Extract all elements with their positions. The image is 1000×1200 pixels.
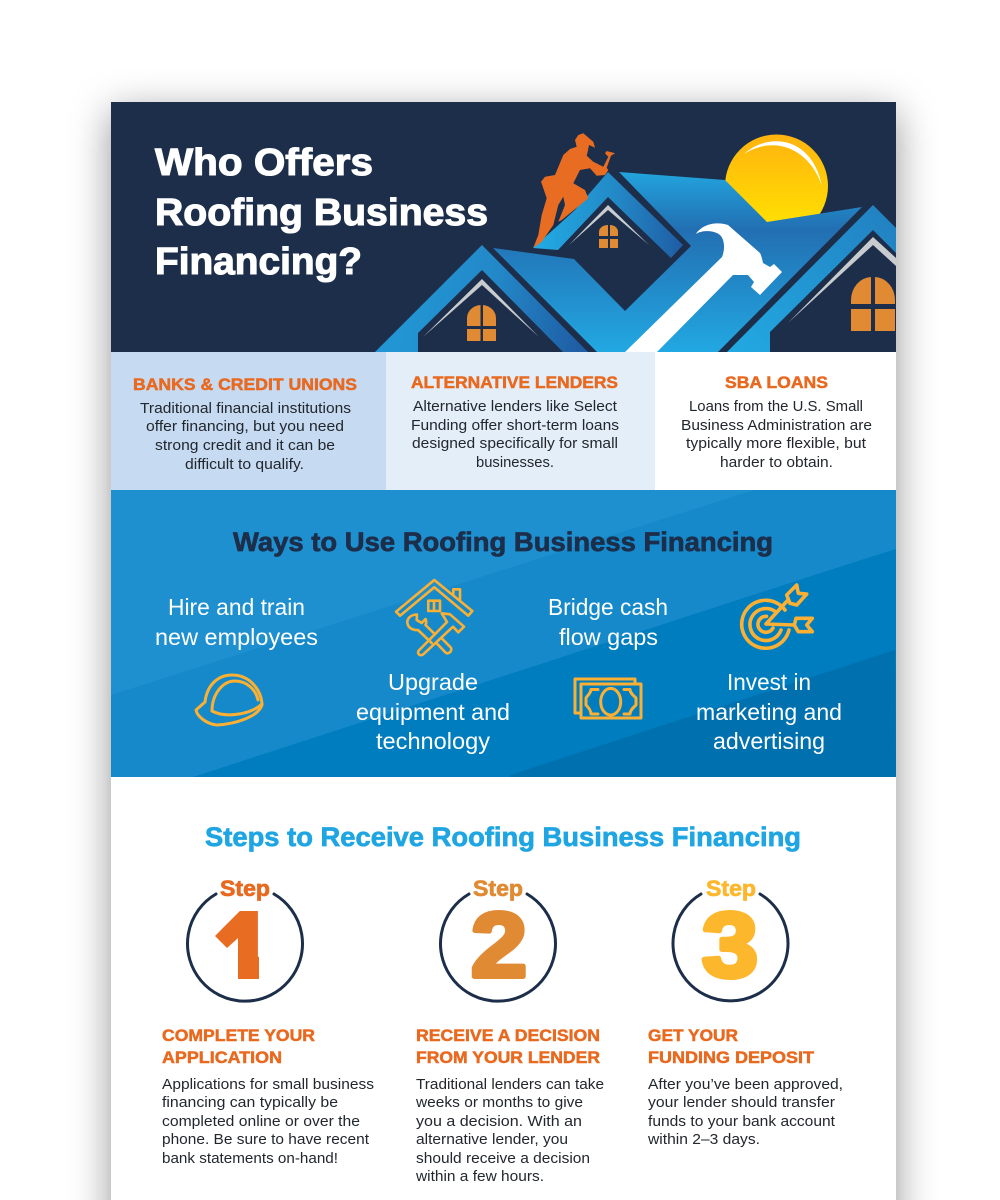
item: invest in marketing	[696, 585, 842, 754]
step 2 text: Traditional lenders can take	[416, 1076, 604, 1093]
step 2	[415, 876, 604, 1185]
step 2 text: alternative lender, you	[416, 1131, 568, 1148]
icon: sun	[725, 134, 828, 222]
panel: lender types	[111, 352, 896, 490]
icon: target with arrows	[742, 585, 812, 648]
step 3 badge	[673, 876, 788, 1001]
step 2 text: FROM YOUR LENDER	[416, 1048, 600, 1067]
panel: banks and credit unions: difficult to qualify.	[185, 456, 304, 473]
icon: hammer	[624, 223, 782, 353]
panel: infographic page	[111, 102, 896, 1200]
item: hire and train	[155, 594, 318, 725]
panel: header	[111, 102, 896, 353]
icon: window	[851, 277, 895, 331]
panel: alternative lenders: businesses.	[476, 454, 554, 471]
item: invest in marketing: marketing and	[696, 699, 842, 725]
heading: Ways to Use Roofing Business Financing	[233, 527, 773, 557]
step 3 text	[647, 1026, 843, 1148]
step 3 badge: Step	[706, 876, 756, 901]
step 2 text: should receive a decision	[416, 1150, 590, 1167]
step 3 text: funds to your bank account	[648, 1113, 836, 1130]
item: upgrade equipment	[356, 580, 510, 754]
page shadow	[111, 112, 896, 1200]
step 1 badge	[187, 876, 302, 1001]
step 2 text	[415, 1026, 604, 1185]
item: invest in marketing: Invest in	[727, 669, 811, 695]
icon: window	[467, 305, 496, 341]
step 2 text: you a decision. With an	[416, 1113, 582, 1130]
panel: alternative lenders: ALTERNATIVE LENDERS	[411, 373, 618, 392]
step 2 text: within a few hours.	[415, 1168, 544, 1185]
step 1	[162, 876, 374, 1167]
step 3	[647, 876, 843, 1148]
step 2 badge	[440, 876, 556, 1001]
step 1 text	[162, 1026, 374, 1167]
step 2 text: weeks or months to give	[415, 1094, 583, 1111]
left house	[375, 245, 588, 352]
upper dormer	[533, 172, 683, 258]
icon: window	[599, 225, 618, 248]
main roof	[493, 172, 862, 352]
panel: alternative lenders: designed specifically for small	[412, 435, 618, 452]
right house	[727, 205, 896, 352]
title: Who Offers	[155, 142, 373, 184]
title	[155, 142, 488, 283]
item: invest in marketing: advertising	[713, 728, 825, 754]
panel: alternative lenders: Alternative lenders like Select	[413, 398, 618, 415]
panel: SBA loans: SBA LOANS	[725, 373, 828, 392]
icon: banknotes	[575, 679, 641, 718]
panel: steps	[162, 822, 843, 1185]
step 3 text: GET YOUR	[648, 1026, 738, 1045]
panel: banks and credit unions: strong credit and it can be	[155, 437, 335, 454]
step 1 text: completed online or over the	[162, 1113, 360, 1130]
step 3 text: your lender should transfer	[648, 1094, 835, 1111]
step 2 badge: Step	[473, 876, 523, 901]
step 1 text: phone. Be sure to have recent	[162, 1131, 370, 1148]
icon: hard hat	[196, 675, 262, 725]
title: Financing?	[155, 241, 362, 283]
panel: banks and credit unions	[111, 352, 386, 490]
item: bridge cash flow: Bridge cash	[548, 594, 668, 620]
panel: banks and credit unions: BANKS & CREDIT UNIONS	[133, 375, 357, 394]
panel: SBA loans	[655, 352, 896, 490]
item: hire and train: new employees	[155, 624, 318, 650]
panel: SBA loans: Loans from the U.S. Small	[689, 398, 863, 415]
item: hire and train: Hire and train	[168, 594, 305, 620]
step 1 badge: Step	[220, 876, 270, 901]
panel: SBA loans: harder to obtain.	[720, 454, 833, 471]
step 1 text: COMPLETE YOUR	[162, 1026, 315, 1045]
icon: house and tools	[396, 580, 472, 655]
step 1 text: financing can typically be	[162, 1094, 338, 1111]
step 3 badge: 3	[702, 894, 758, 996]
panel: SBA loans: typically more flexible, but	[686, 435, 867, 452]
panel: SBA loans: Business Administration are	[681, 417, 872, 434]
step 3 text: within 2–3 days.	[647, 1131, 760, 1148]
item: upgrade equipment: technology	[376, 728, 491, 754]
step 2 badge: 2	[471, 894, 527, 996]
title: Roofing Business	[155, 192, 488, 234]
panel: alternative lenders	[386, 352, 655, 490]
item: bridge cash flow: flow gaps	[559, 624, 658, 650]
step 2 text: RECEIVE A DECISION	[416, 1026, 600, 1045]
heading: Steps to Receive Roofing Business Financing	[205, 822, 801, 852]
panel: banks and credit unions: offer financing, but you need	[146, 418, 344, 435]
item: upgrade equipment: equipment and	[356, 699, 510, 725]
panel: banks and credit unions: Traditional financial institutions	[140, 400, 351, 417]
step 1 badge: 1	[212, 889, 264, 1001]
panel: ways to use financing	[111, 488, 896, 777]
step 1 text: APPLICATION	[162, 1048, 282, 1067]
step 1 text: Applications for small business	[162, 1076, 374, 1093]
item: upgrade equipment: Upgrade	[388, 669, 478, 695]
item: bridge cash flow	[548, 594, 668, 718]
icon: roofer silhouette	[533, 133, 615, 248]
step 3 text: FUNDING DEPOSIT	[648, 1048, 815, 1067]
panel: alternative lenders: Funding offer short-term loans	[411, 417, 619, 434]
step 3 text: After you’ve been approved,	[648, 1076, 843, 1093]
illustration: rooftops	[375, 133, 896, 353]
step 1 text: bank statements on-hand!	[162, 1150, 338, 1167]
